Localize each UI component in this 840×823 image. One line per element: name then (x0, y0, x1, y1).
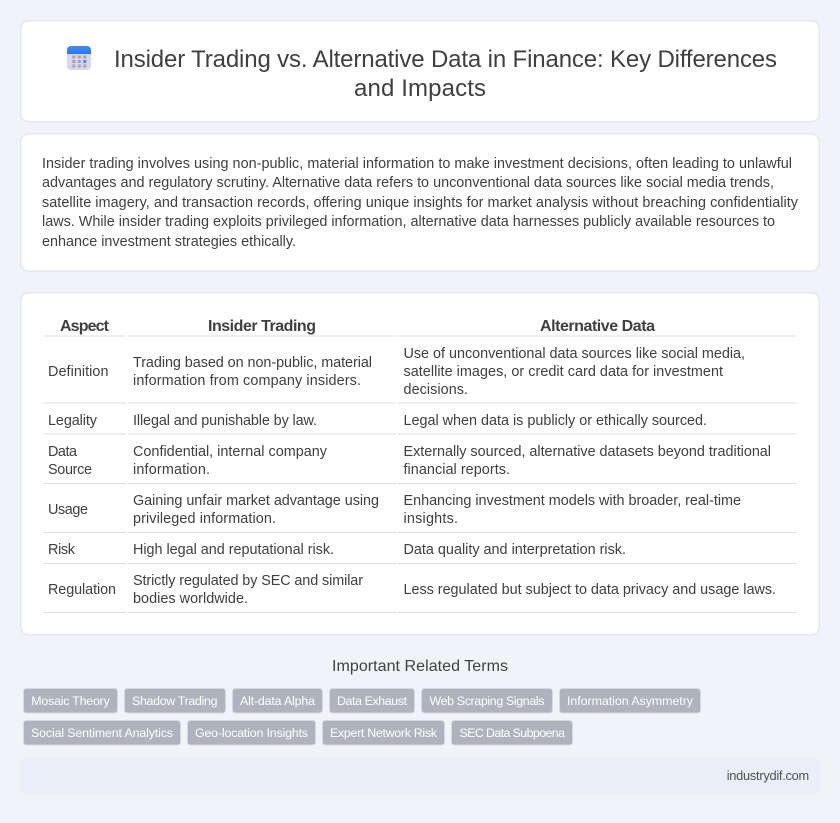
table header row (60, 318, 655, 335)
table row: usage: Gaining unfair market advantage using (133, 493, 379, 509)
table row: risk (48, 542, 626, 558)
tag: Mosaic Theory: Mosaic Theory (31, 694, 111, 708)
table row: data source (48, 444, 771, 478)
tag: Shadow Trading (124, 688, 226, 713)
table row: data source: Data (48, 444, 77, 460)
text block: introduction paragraph: Insider trading involves using non-public, material information to make investment decisions, often leading to unlawful (42, 156, 792, 172)
table row: risk: Data quality and interpretation risk. (404, 542, 626, 558)
tag: Data Exhaust: Data Exhaust (337, 694, 408, 708)
tag: Web Scraping Signals: Web Scraping Signals (430, 694, 544, 708)
table row: regulation: Regulation (48, 582, 116, 598)
text block: introduction paragraph: enhance investment strategies ethically. (42, 234, 296, 250)
table row: definition: Use of unconventional data sources like social media, (404, 346, 745, 362)
text block: introduction paragraph: laws. While insider trading exploits privileged information, alternative data harnesses publicly available resources to (42, 214, 775, 230)
table row: usage: Enhancing investment models with broader, real-time (404, 493, 741, 509)
panel: introduction (21, 134, 819, 271)
tag: Information Asymmetry (560, 688, 700, 713)
table row: data source: Externally sourced, alternative datasets beyond traditional (404, 444, 771, 460)
table header row: Aspect (60, 318, 110, 335)
table row: legality: Illegal and punishable by law. (133, 413, 317, 429)
table row: usage: Usage (48, 502, 88, 518)
table row: legality (48, 413, 707, 429)
table row: regulation (48, 573, 776, 607)
table row: legality: Legal when data is publicly or ethically sourced. (404, 413, 707, 429)
table row: usage (48, 493, 741, 527)
table row: usage: privileged information. (133, 511, 276, 527)
heading: important related terms: Important Related Terms (332, 658, 508, 675)
table row: risk: High legal and reputational risk. (133, 542, 334, 558)
tag: Geo-location Insights (188, 720, 316, 745)
tag: Mosaic Theory (24, 688, 118, 713)
tag: Social Sentiment Analytics: Social Sentiment Analytics (31, 726, 173, 740)
table row: regulation: bodies worldwide. (133, 591, 248, 607)
table row: definition: information from company insiders. (133, 373, 361, 389)
footer source text: industrydif.com (727, 768, 809, 783)
tag: SEC Data Subpoena: SEC Data Subpoena (460, 726, 565, 740)
table header row: Alternative Data (540, 318, 655, 335)
text block: introduction paragraph: advantages and regulatory scrutiny. Alternative data refers to unconventional data sources like social media trends, (42, 175, 774, 191)
icon: calendar (67, 46, 91, 70)
text block: introduction paragraph: satellite imagery, and transaction records, offering unique insights for market analysis without breaching confidentiality (42, 195, 799, 211)
text block: introduction paragraph (42, 156, 799, 250)
table row: legality: Legality (48, 413, 98, 429)
table row: definition: satellite images, or credit card data for investment (404, 364, 723, 380)
tag: Alt-data Alpha: Alt-data Alpha (240, 694, 315, 708)
table header row: Insider Trading (208, 318, 316, 335)
tag: Expert Network Risk: Expert Network Risk (330, 726, 438, 740)
tag: Web Scraping Signals (422, 688, 552, 713)
footer bar (20, 759, 820, 793)
tag list: related terms (24, 688, 700, 745)
table row: definition: Trading based on non-public, material (133, 355, 372, 371)
table row: data source: information. (133, 462, 210, 478)
tag: Information Asymmetry: Information Asymmetry (567, 694, 694, 708)
tag: Geo-location Insights: Geo-location Insights (195, 726, 308, 740)
table row: definition: decisions. (404, 382, 468, 398)
table row: definition: Definition (48, 364, 108, 380)
panel: title header (21, 21, 819, 122)
table row: data source: financial reports. (404, 462, 510, 478)
table row: data source: Confidential, internal company (133, 444, 328, 460)
table row: usage: insights. (404, 511, 458, 527)
table row: regulation: Less regulated but subject to data privacy and usage laws. (404, 582, 776, 598)
tag: SEC Data Subpoena (452, 720, 572, 745)
tag: Alt-data Alpha (232, 688, 322, 713)
table row: regulation: Strictly regulated by SEC and similar (133, 573, 363, 589)
title: Insider Trading vs. Alternative Data in Finance: Key Differences (114, 46, 777, 73)
table row: definition (48, 346, 745, 398)
panel: comparison table (21, 293, 819, 635)
tag: Data Exhaust (330, 688, 414, 713)
title (114, 46, 777, 102)
table row: data source: Source (48, 462, 92, 478)
tag: Expert Network Risk (322, 720, 444, 745)
title: and Impacts (354, 75, 486, 102)
tag: Shadow Trading: Shadow Trading (132, 694, 218, 708)
table row: risk: Risk (48, 542, 76, 558)
tag: Social Sentiment Analytics (24, 720, 180, 745)
